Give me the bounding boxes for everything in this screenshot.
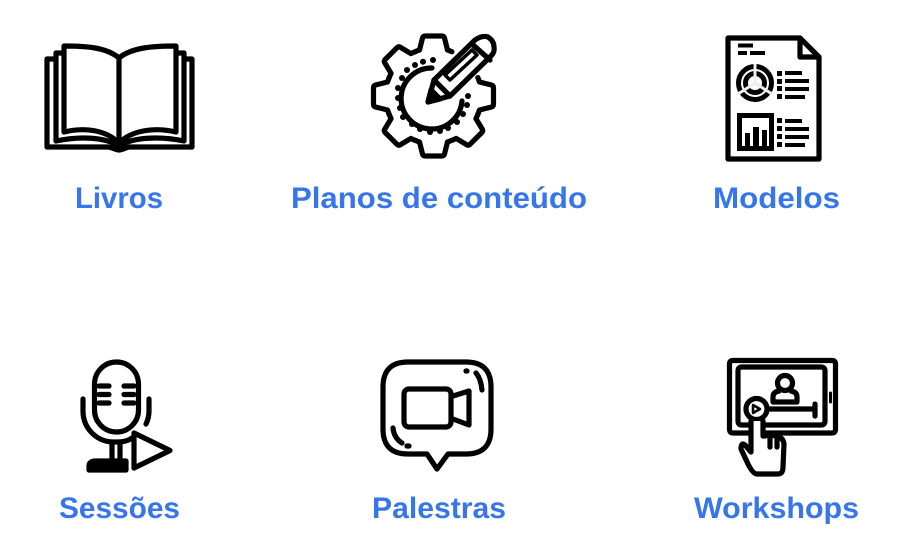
label: Livros: Livros [75,182,163,215]
icon: microphone with play [83,362,170,470]
icon: gear with pencil [374,36,494,156]
icon: open book [47,46,192,150]
label: Workshops: Workshops [694,492,859,525]
icon: report document [728,38,819,159]
icon: video speech bubble [383,362,491,469]
label: Sessões: Sessões [59,492,180,525]
icon: tablet video with tapping hand [730,360,836,474]
label: Modelos: Modelos [713,182,840,215]
label: Planos de conteúdo: Planos de conteúdo [291,182,587,215]
label: Palestras: Palestras [372,492,506,525]
